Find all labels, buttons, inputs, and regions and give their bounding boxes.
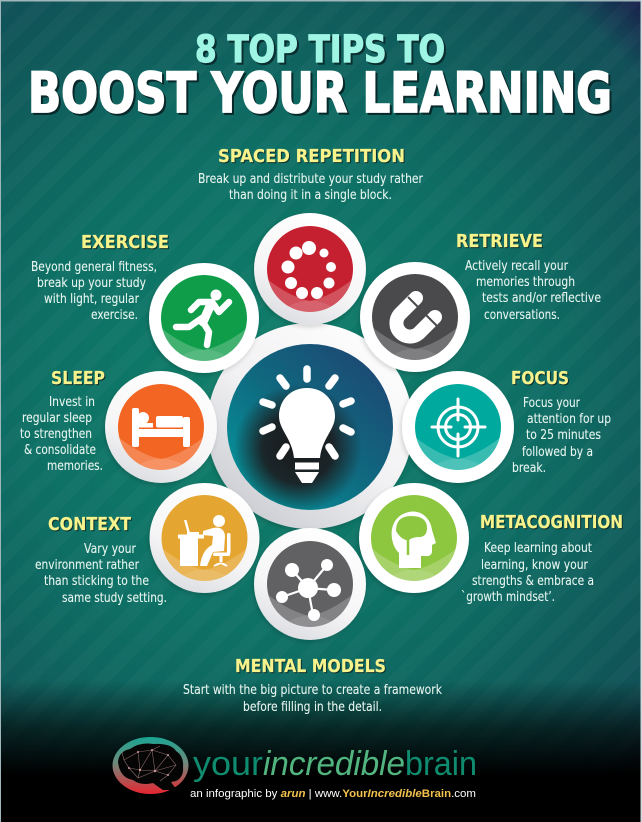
text block (465, 259, 601, 323)
text block: followed by a (522, 445, 593, 460)
text block: exercise. (91, 308, 138, 323)
tip: focus (511, 368, 611, 476)
logo (112, 737, 477, 800)
credit line: an infographic by arun | www.YourIncredibleBrain.com (190, 788, 476, 800)
disk: focus (402, 371, 514, 483)
text block: same study setting. (62, 591, 167, 606)
disk: metacognition (359, 483, 469, 593)
text block: Invest in (49, 395, 95, 410)
text block: with light, regular (44, 292, 140, 307)
icon: network (276, 559, 341, 621)
icon: runner (176, 290, 229, 345)
text block: memories through (476, 275, 575, 290)
wordmark (193, 745, 477, 783)
icon: head with brain (392, 512, 436, 568)
heading: EXERCISE (81, 232, 169, 253)
tip: exercise (31, 232, 169, 323)
tip: context (35, 514, 167, 606)
icon: person at desk (178, 515, 230, 566)
heading: SPACED REPETITION (218, 146, 405, 167)
heading: MENTAL MODELS (235, 656, 386, 677)
disk: context (150, 483, 260, 593)
text block: Beyond general fitness, (31, 260, 157, 275)
central circle (227, 344, 393, 510)
tip: retrieve (456, 231, 601, 323)
heading: FOCUS (511, 368, 569, 389)
icon: target (432, 399, 485, 456)
text block: memories. (47, 459, 103, 474)
title line 1: 8 TOP TIPS TO (195, 28, 445, 71)
text block: strengths & embrace a (472, 574, 594, 589)
text block: than doing it in a single block. (229, 188, 392, 203)
text block (512, 396, 611, 476)
text block: Focus your (523, 396, 581, 411)
text block: Keep learning about (484, 541, 592, 556)
text block: regular sleep (22, 411, 92, 426)
text block: to strengthen (20, 427, 92, 442)
wordmark: brain (405, 745, 477, 783)
disk: exercise (149, 263, 259, 373)
icon: magnet (396, 297, 437, 337)
text block: environment rather (35, 558, 140, 573)
text block: Start with the big picture to create a framework (183, 683, 442, 698)
text block: before filling in the detail. (243, 700, 382, 715)
text block: `growth mindset’. (461, 590, 555, 605)
wordmark: your (193, 745, 263, 783)
text block (20, 395, 103, 474)
text block: attention for up (527, 412, 611, 427)
central hub ring (207, 323, 413, 529)
icon: light bulb (263, 369, 351, 483)
text block (183, 683, 442, 715)
text block (198, 172, 424, 203)
text block: tests and/or reflective (482, 291, 601, 306)
icon: bed (132, 408, 190, 447)
text block (461, 541, 594, 605)
disk: spaced repetition (254, 213, 366, 325)
disk: sleep (105, 371, 217, 483)
text block (31, 260, 157, 323)
heading: SLEEP (51, 368, 105, 389)
wordmark: incredible (263, 745, 405, 783)
text block: learning, know your (481, 558, 589, 573)
icon: ring of dots (282, 241, 336, 299)
tip: mental models (183, 656, 442, 715)
disk: mental models (254, 528, 366, 640)
text block: & consolidate (24, 443, 96, 458)
text block: to 25 minutes (526, 428, 601, 443)
text block: break up your study (37, 276, 146, 291)
tip: spaced repetition (198, 146, 424, 203)
icon: brain emblem (112, 737, 188, 794)
text block (35, 542, 167, 606)
disk: retrieve (360, 262, 470, 372)
title (28, 28, 612, 125)
text block: break. (512, 461, 546, 476)
tip: sleep (20, 368, 105, 474)
text block: than sticking to the (44, 574, 149, 589)
text block: conversations. (484, 308, 560, 323)
heading: RETRIEVE (456, 231, 543, 252)
tip: metacognition (461, 512, 623, 605)
text block: Vary your (84, 542, 137, 557)
heading: CONTEXT (48, 514, 132, 535)
text block: Actively recall your (465, 259, 569, 274)
text block: Break up and distribute your study rather (198, 172, 424, 187)
